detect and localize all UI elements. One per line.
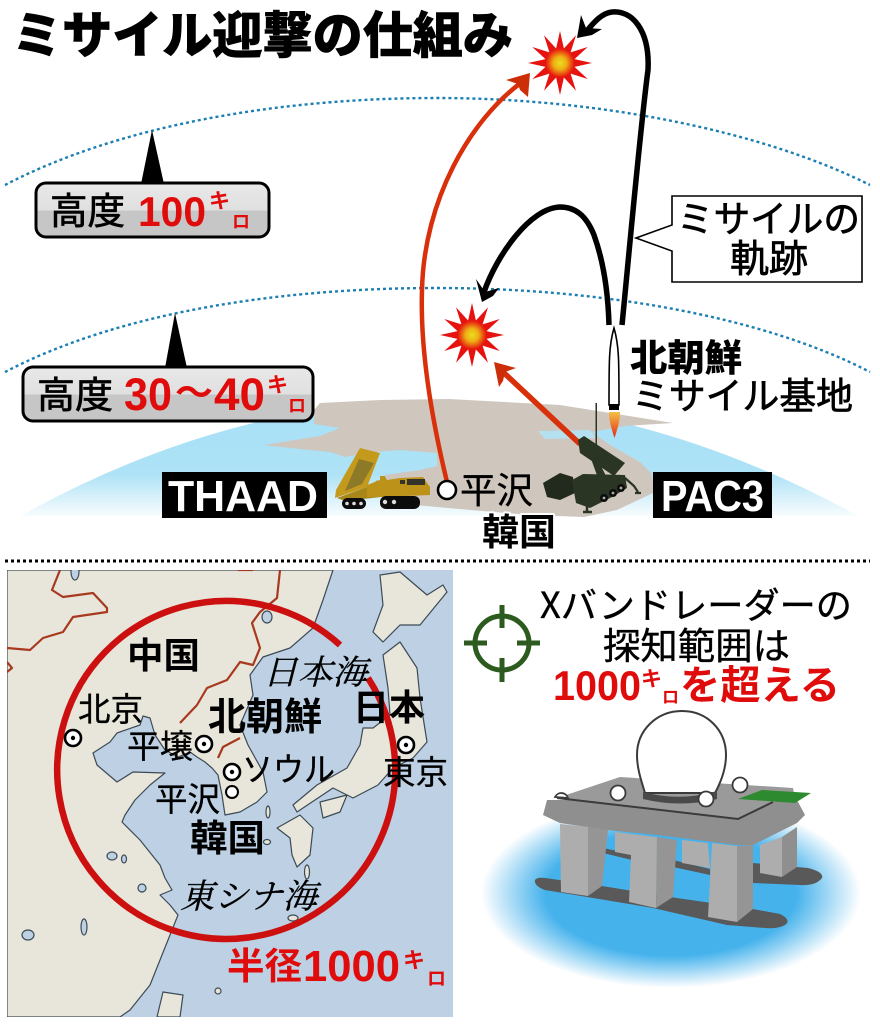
label: altitude 30-40 km: ロ xyxy=(288,392,306,418)
label: Sea of Japan: 日本海 xyxy=(263,645,372,694)
label: altitude 100 km xyxy=(36,181,269,237)
section divider xyxy=(5,560,870,562)
icon: THAAD launcher truck xyxy=(335,448,430,509)
icon: crosshair xyxy=(464,605,540,682)
text: X-band radar range xyxy=(540,577,852,711)
altitude marker spike 30-40 km xyxy=(165,313,187,368)
label: altitude 30-40 km: キ xyxy=(267,369,288,399)
callout: missile trajectory xyxy=(636,189,862,283)
land: Taiwan and small islands xyxy=(22,564,310,1017)
explosion: upper xyxy=(528,31,592,95)
icon: sea-based X-band radar xyxy=(481,711,861,988)
water glow xyxy=(481,798,861,988)
label: North Korea missile base: ミサイル基地 xyxy=(632,366,853,420)
city markers xyxy=(65,730,414,798)
marker: Pyeongtaek xyxy=(438,481,456,499)
label: Seoul: ソウル xyxy=(242,743,335,791)
text: X-band radar range: を超える xyxy=(680,653,840,711)
land: mainland Asia xyxy=(7,570,333,1017)
trajectory: high missile arrow xyxy=(577,12,648,325)
green helipad xyxy=(738,790,811,803)
text: X-band radar range: キ xyxy=(641,663,662,693)
label: altitude 100 km: 100 xyxy=(138,188,206,235)
label: Beijing: 北京 xyxy=(78,683,143,731)
front pontoon xyxy=(535,878,788,928)
label: China: 中国 xyxy=(127,627,200,679)
border lines xyxy=(7,570,280,758)
label: South Korea: 韓国 xyxy=(482,502,556,556)
altitude arc: 30-40 km xyxy=(5,288,870,372)
label: altitude 30-40 km xyxy=(23,364,313,421)
label: Tokyo: 東京 xyxy=(383,746,448,794)
deck domes xyxy=(555,778,748,806)
land: Kyushu xyxy=(277,815,313,867)
land: Shikoku xyxy=(320,795,347,818)
altitude arc: 100 km xyxy=(5,98,870,185)
interceptor arrow: PAC3 xyxy=(494,362,580,444)
altitude marker spike 100 km xyxy=(141,130,164,184)
label: East China Sea: 東シナ海 xyxy=(180,869,322,918)
deck body xyxy=(543,800,805,845)
icon: North Korean missile xyxy=(609,328,620,438)
label: altitude 30-40 km: 30 xyxy=(124,369,172,420)
explosion: lower xyxy=(440,303,504,367)
label: altitude 30-40 km: 高度 xyxy=(37,365,113,419)
label: Pyongyang: 平壌 xyxy=(127,720,193,768)
radome base xyxy=(643,791,717,804)
label: Pyeongtaek on map: 平沢 xyxy=(155,773,220,821)
label: North Korea: 北朝鮮 xyxy=(208,686,322,741)
label: altitude 30-40 km: ～ xyxy=(175,364,213,416)
label: altitude 100 km: ロ xyxy=(232,208,250,234)
land: upper sea notch xyxy=(538,430,596,439)
map labels xyxy=(78,627,448,918)
label: North Korea missile base xyxy=(630,328,853,420)
land: Korean peninsula region xyxy=(264,399,673,517)
icon: PAC3 launcher xyxy=(543,403,641,512)
radome xyxy=(637,711,726,793)
callout: missile trajectory: ミサイルの xyxy=(677,189,860,243)
label: South Korea on map: 韓国 xyxy=(190,808,265,862)
label: radius 1000 km: キ xyxy=(403,943,425,975)
legs xyxy=(560,824,588,896)
text: X-band radar range: ロ xyxy=(662,683,679,708)
label: Japan: 日本 xyxy=(353,679,425,731)
label: radius 1000 km: 半径 xyxy=(227,936,302,990)
deck top xyxy=(557,777,795,819)
red range circle xyxy=(57,601,395,939)
label: altitude 30-40 km: 40 xyxy=(214,369,265,420)
label: altitude 100 km: キ xyxy=(209,185,230,215)
rear pontoon xyxy=(753,863,822,885)
label: Pyeongtaek: 平沢 xyxy=(460,462,533,514)
map panel xyxy=(7,564,453,1017)
earth dome xyxy=(20,400,858,516)
rear legs xyxy=(682,840,710,868)
label: North Korea missile base: 北朝鮮 xyxy=(630,328,742,382)
interceptor arrow: THAAD xyxy=(422,73,530,482)
label: THAAD: THAAD xyxy=(168,472,318,521)
label: radius 1000 km xyxy=(227,936,446,991)
text: X-band radar range: Xバンドレーダーの xyxy=(540,577,852,629)
label: altitude 100 km: 高度 xyxy=(50,181,125,235)
land: Hokkaido xyxy=(373,572,447,642)
label: radius 1000 km: 1000 xyxy=(303,942,400,991)
text: X-band radar range: 1000 xyxy=(553,662,641,709)
trajectory: low missile arrow xyxy=(476,207,609,325)
label: radius 1000 km: ロ xyxy=(427,964,446,991)
callout: missile trajectory: 軌跡 xyxy=(730,228,808,283)
label: PAC3: PAC3 xyxy=(661,472,764,521)
land: Honshu xyxy=(293,642,427,812)
text: X-band radar range: 探知範囲は xyxy=(603,616,790,670)
